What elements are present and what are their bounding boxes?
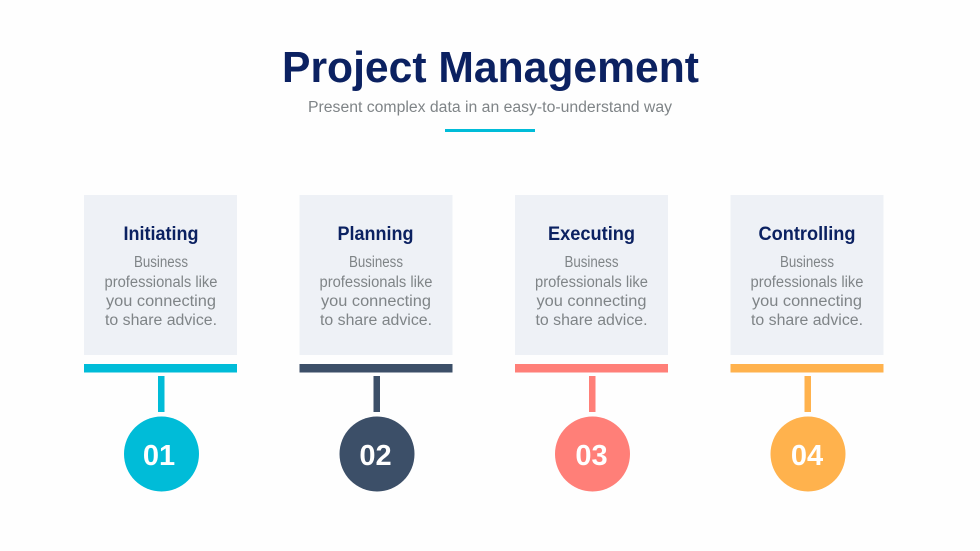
text block: controlling description: you connecting [752,293,862,310]
text block: executing description: to share advice. [536,312,648,329]
text block: initiating description: to share advice. [105,312,217,329]
number badge 03: 03 [575,440,608,472]
colour bar 3 [515,364,668,372]
card background 1 [84,195,237,355]
colour bar 1 [84,364,237,372]
text block: controlling description: to share advice. [751,312,863,329]
panel: step 1 initiating [84,195,237,492]
text block: executing description: professionals like [535,274,648,291]
connector 1 [158,376,164,412]
panel: step 3 executing [515,195,668,492]
subtitle: Present complex data in an easy-to-understand way [308,99,672,116]
heading: controlling: Controlling [758,223,856,245]
connector 4 [804,376,811,412]
colour bar 4 [730,364,884,372]
title underline accent [445,129,535,132]
text block: planning description [320,254,432,329]
text block: initiating description: you connecting [106,293,216,310]
number badge 04 [770,416,846,492]
number badge 02: 02 [359,440,392,472]
heading: executing: Executing [548,223,635,245]
title: Project Management [282,43,699,92]
colour bar 2 [300,364,452,372]
text block: executing description: you connecting [536,293,646,310]
text block: controlling description: professionals like [750,274,864,291]
number badge 04: 04 [791,440,823,472]
text block: controlling description: Business [780,254,834,271]
text block: planning description: professionals like [320,274,432,291]
text block: initiating description: professionals like [104,274,218,291]
text block: executing description [535,254,648,329]
heading: planning: Planning [338,223,414,245]
number badge 01 [124,416,199,492]
connector 3 [589,376,596,412]
connector 2 [374,376,380,412]
card background 4 [730,195,884,355]
text block: planning description: to share advice. [320,312,432,329]
panel: step 4 controlling [730,195,884,492]
text block: initiating description: Business [134,254,188,271]
text block: planning description: you connecting [321,293,431,310]
heading: initiating: Initiating [124,223,198,245]
number badge 03 [555,416,630,492]
card background 2 [300,195,452,355]
number badge 02 [340,416,414,492]
text block: executing description: Business [564,254,619,271]
text block: controlling description [750,254,864,329]
text block: planning description: Business [349,254,403,271]
panel: step 2 planning [300,195,452,492]
card background 3 [515,195,668,355]
number badge 01: 01 [143,440,175,472]
text block: initiating description [104,254,218,329]
